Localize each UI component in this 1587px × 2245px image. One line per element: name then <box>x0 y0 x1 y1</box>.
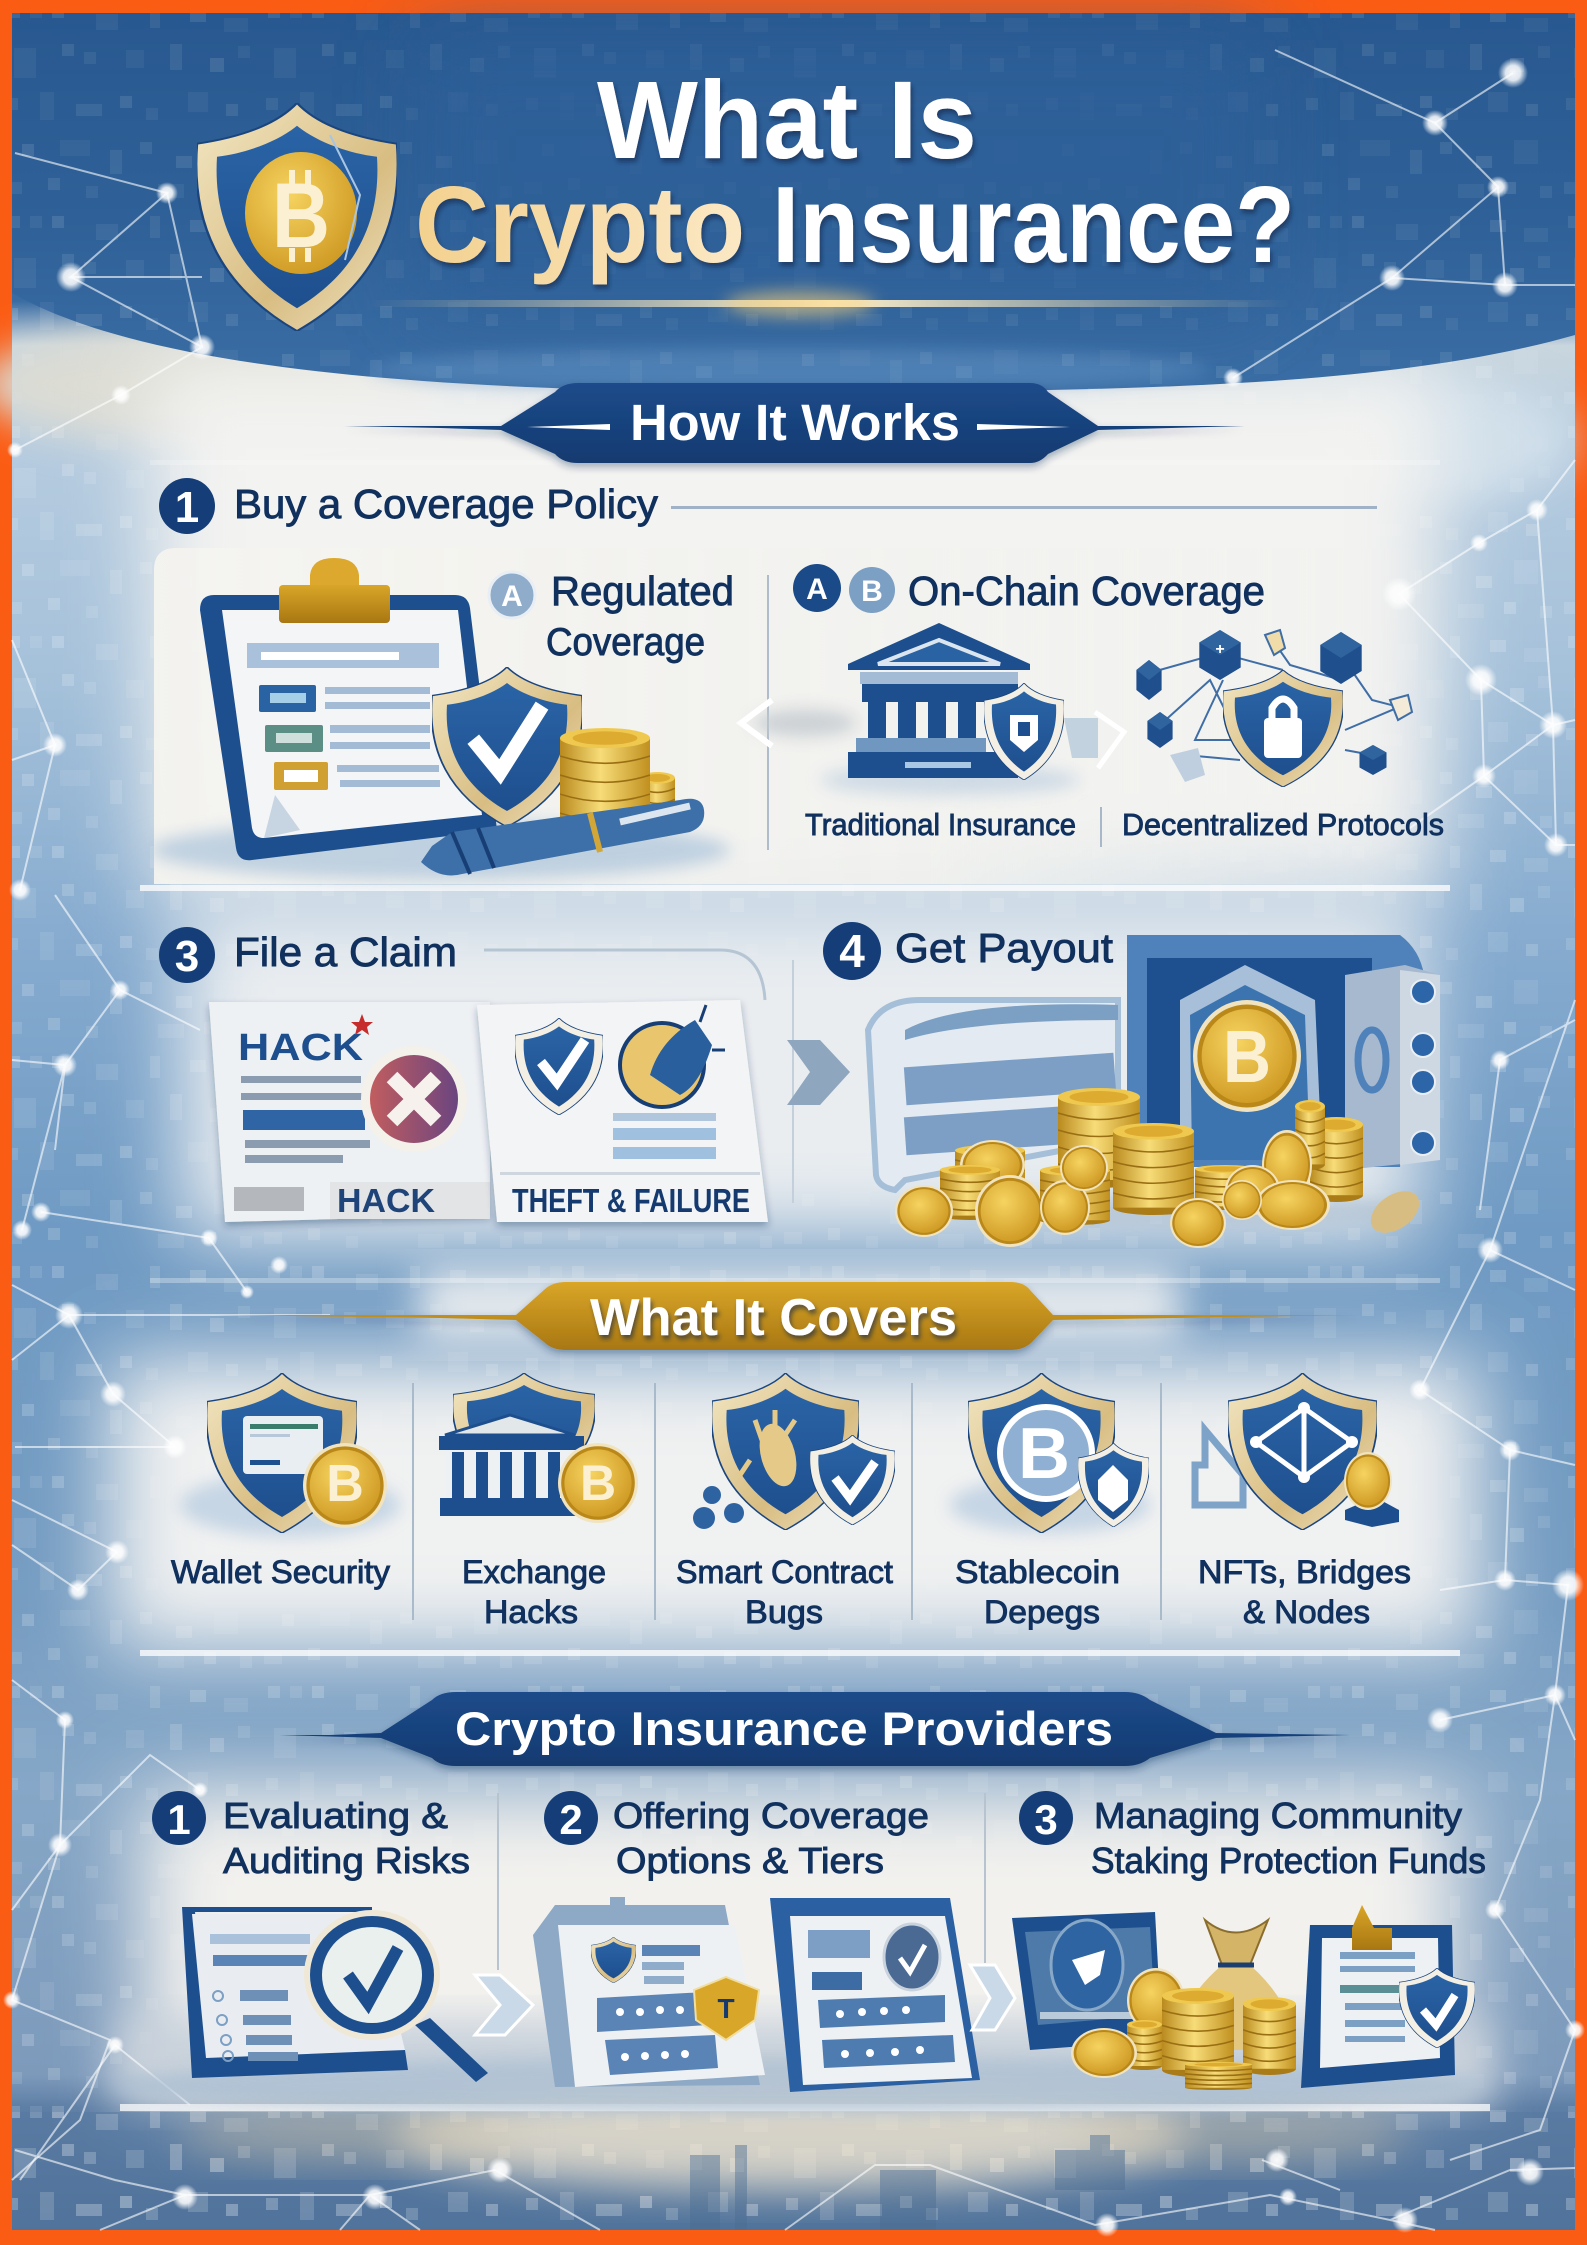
icon: gold coin pile <box>895 1088 1430 1248</box>
icon: check shield <box>431 667 583 827</box>
coverage: stablecoin depegs <box>950 1373 1150 1630</box>
provider step 3 text <box>984 1791 1486 1963</box>
arrow: provider step 2 to 3 <box>970 1965 1015 2030</box>
provider step 1 text: Evaluating & <box>223 1795 448 1836</box>
step 4 heading: Get Payout <box>895 925 1114 971</box>
provider step 2 text: Offering Coverage <box>613 1795 929 1836</box>
document: theft or failure <box>477 1000 768 1222</box>
document: hack report: HACK <box>337 1182 435 1219</box>
step 3 heading <box>159 927 794 1203</box>
step 1 heading <box>159 478 1377 534</box>
floor shadow <box>110 2057 1490 2113</box>
coverage: stablecoin depegs: Depegs <box>984 1594 1100 1630</box>
coverage: stablecoin depegs: Stablecoin <box>955 1554 1120 1590</box>
title: Crypto <box>415 164 745 286</box>
coverage: stablecoin depegs: B <box>1018 1414 1070 1494</box>
coverage: nfts, bridges and nodes: NFTs, Bridges <box>1198 1554 1411 1590</box>
icon: bitcoin shield logo <box>196 103 398 331</box>
coverage: wallet security: B <box>326 1455 364 1513</box>
top banner background <box>12 13 1575 392</box>
icon: pen <box>421 799 704 876</box>
provider step 1 text: Auditing Risks <box>223 1840 470 1881</box>
coverage: wallet security <box>171 1373 400 1590</box>
heading: What It Covers: What It Covers <box>590 1289 957 1347</box>
provider step 1 text <box>152 1791 470 1881</box>
icon: coin stacks <box>560 728 675 840</box>
document: hack report: HACK <box>238 1027 364 1069</box>
provider step 2 text: Options & Tiers <box>616 1840 884 1881</box>
heading: Crypto Insurance Providers <box>279 1692 1350 1766</box>
coverage: smart contract bugs: Bugs <box>745 1594 823 1630</box>
label: regulated coverage: Coverage <box>546 621 705 664</box>
arrow: provider step 1 to 2 <box>475 1975 533 2035</box>
heading: Crypto Insurance Providers: Crypto Insurance Providers <box>455 1702 1113 1755</box>
coverage: exchange hacks: Hacks <box>484 1594 578 1630</box>
label: on-chain coverage: B <box>861 575 883 608</box>
step 1 heading: 1 <box>175 483 199 532</box>
label: regulated coverage: Regulated <box>551 568 734 614</box>
icon: decentralized network with lock shield: + <box>1215 641 1225 658</box>
step 4 heading <box>823 922 1114 980</box>
document: theft or failure: THEFT & FAILURE <box>512 1182 750 1219</box>
icon: clipboard with shield <box>1301 1905 1475 2088</box>
step 3 heading: File a Claim <box>234 929 457 975</box>
icon: monitor <box>1012 1912 1162 2050</box>
labels: insurance types: Decentralized Protocols <box>1122 807 1444 842</box>
icon: bitcoin shield logo: B <box>272 165 330 267</box>
provider step 3 text: 3 <box>1034 1796 1058 1843</box>
step 1 heading: Buy a Coverage Policy <box>234 481 659 527</box>
coverage: exchange hacks: B <box>580 1455 616 1511</box>
title <box>370 59 1295 317</box>
icon: open safe with bitcoin: B <box>1223 1015 1271 1098</box>
icon: audit document with magnifier <box>182 1907 488 2082</box>
coverage: wallet security: Wallet Security <box>171 1554 390 1590</box>
icon: certificate scroll <box>868 1000 1118 1190</box>
heading: How It Works: How It Works <box>630 394 960 451</box>
arrow: claim to payout <box>787 1040 850 1105</box>
coverage: smart contract bugs <box>676 1373 895 1630</box>
icon: decentralized network with lock shield <box>1136 630 1412 787</box>
label: on-chain coverage: On-Chain Coverage <box>908 568 1265 614</box>
coverage: nfts, bridges and nodes <box>1195 1373 1411 1630</box>
coverage: exchange hacks: Exchange <box>462 1554 606 1590</box>
provider step 2 text <box>497 1791 929 1970</box>
labels: insurance types: Traditional Insurance <box>805 807 1076 842</box>
coverage: exchange hacks <box>439 1373 638 1630</box>
step 3 heading: 3 <box>175 932 199 981</box>
icon: coverage tier document <box>533 1897 765 2087</box>
label: regulated coverage: A <box>501 580 523 613</box>
provider step 3 text: Staking Protection Funds <box>1091 1840 1486 1881</box>
icon: bank with shield <box>820 623 1080 795</box>
icon: clipboard policy <box>150 558 730 880</box>
label: on-chain coverage <box>793 564 1265 614</box>
column dividers <box>412 1383 1162 1620</box>
icon: tier comparison document <box>770 1898 980 2092</box>
title: Insurance? <box>772 164 1295 286</box>
step 4 heading: 4 <box>839 925 865 977</box>
label: regulated coverage <box>489 568 734 664</box>
label: on-chain coverage: A <box>806 573 828 606</box>
coverage: smart contract bugs: Smart Contract <box>676 1554 893 1590</box>
arrow: right chevron <box>1064 712 1124 768</box>
coverage: nfts, bridges and nodes: & Nodes <box>1243 1594 1370 1630</box>
provider step 1 text: 1 <box>167 1796 191 1843</box>
panel dividers: light horizontal bands <box>120 460 1490 2111</box>
heading: What It Covers <box>215 1282 1360 1350</box>
icon: open safe with bitcoin <box>1127 935 1440 1170</box>
panel: coverage options <box>154 548 1450 884</box>
labels: insurance types <box>805 807 1444 847</box>
icon: coin bag and stacks <box>1071 1920 1296 2090</box>
arrow: left chevron <box>741 700 857 746</box>
provider step 2 text: 2 <box>559 1796 583 1843</box>
document: hack report <box>209 1002 490 1222</box>
heading: How It Works <box>344 383 1245 463</box>
icon: coverage tier document: T <box>717 1993 735 2024</box>
title: What Is <box>597 59 977 182</box>
provider step 3 text: Managing Community <box>1094 1795 1462 1836</box>
